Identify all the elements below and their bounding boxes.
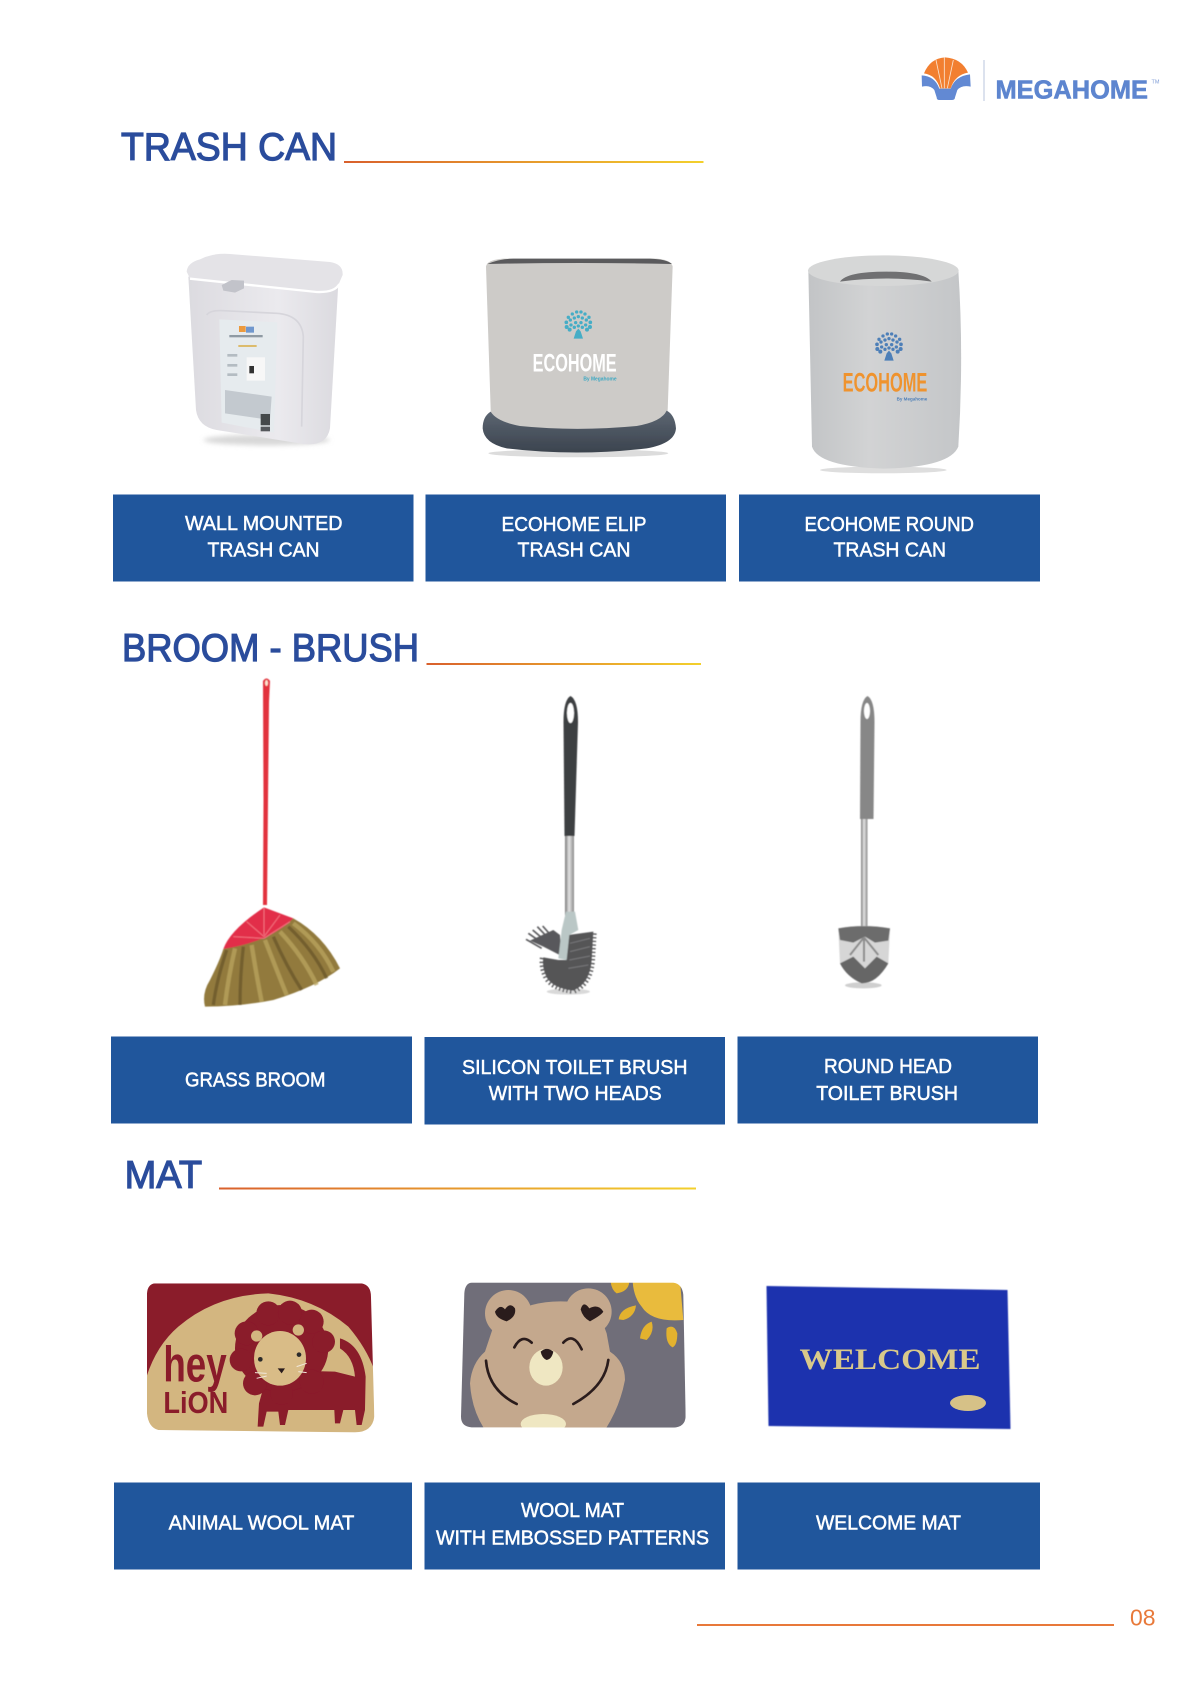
product: animal wool mat: LiON (163, 1386, 228, 1420)
logo: Megahome (922, 57, 1160, 105)
page number footer: 08 (1130, 1604, 1156, 1630)
product label: wall mounted trash can: TRASH CAN (208, 539, 320, 562)
product label: silicon toilet brush with two heads: SILICON TOILET BRUSH (462, 1056, 688, 1079)
product label: grass broom: GRASS BROOM (185, 1068, 326, 1091)
product: wool mat with embossed patterns (460, 1281, 687, 1434)
product label: grass broom (111, 1036, 412, 1124)
logo wordmark: MEGAHOME (996, 77, 1148, 105)
product: silicon toilet brush (526, 696, 593, 995)
heading: broom - brush: BROOM - BRUSH (122, 627, 419, 670)
product: ecohome round trash can (808, 255, 961, 473)
mat lettering: WELCOME (800, 1343, 980, 1376)
product: welcome mat (766, 1286, 1010, 1429)
icon: shell mark (922, 57, 971, 100)
product label: wall mounted trash can: WALL MOUNTED (185, 512, 342, 535)
product label: animal wool mat: ANIMAL WOOL MAT (169, 1512, 355, 1534)
product: animal wool mat (145, 1282, 377, 1435)
heading: trash can: TRASH CAN (121, 126, 337, 169)
product label: round head toilet brush: ROUND HEAD (824, 1055, 952, 1078)
product label: silicon toilet brush with two heads: WITH TWO HEADS (489, 1082, 662, 1105)
product label: ecohome elip trash can: ECOHOME ELIP (502, 513, 646, 536)
product label: wool mat with embossed patterns: WOOL MAT (521, 1499, 624, 1522)
product label: ecohome round trash can (739, 494, 1040, 582)
product: grass broom (204, 678, 340, 1007)
mat lettering: hey (163, 1337, 227, 1393)
product label: ecohome round trash can: TRASH CAN (834, 539, 946, 562)
product: ecohome elip trash can: By Megahome (583, 377, 617, 383)
ecohome label: ECOHOME (533, 350, 617, 378)
product: round head toilet brush (838, 696, 890, 988)
product label: ecohome round trash can: ECOHOME ROUND (804, 513, 974, 536)
product label: wool mat with embossed patterns (424, 1482, 725, 1570)
logo: Megahome: TM (1152, 80, 1160, 86)
product label: wall mounted trash can (113, 494, 414, 582)
product: ecohome round trash can: By Megahome (897, 397, 928, 403)
product label: ecohome elip trash can: TRASH CAN (518, 539, 630, 562)
product label: welcome mat: WELCOME MAT (816, 1512, 961, 1534)
product label: wool mat with embossed patterns: WITH EMBOSSED PATTERNS (436, 1526, 709, 1549)
product label: silicon toilet brush with two heads (424, 1037, 725, 1124)
ecohome label: ECOHOME (843, 368, 927, 398)
product: wall mounted trash can (187, 254, 343, 445)
heading: mat: MAT (125, 1154, 202, 1197)
product label: round head toilet brush: TOILET BRUSH (816, 1082, 958, 1105)
product label: animal wool mat (114, 1482, 412, 1570)
product: ecohome elip trash can (483, 259, 676, 457)
product label: ecohome elip trash can (426, 494, 726, 582)
product label: welcome mat (738, 1482, 1040, 1570)
product label: round head toilet brush (738, 1036, 1038, 1124)
